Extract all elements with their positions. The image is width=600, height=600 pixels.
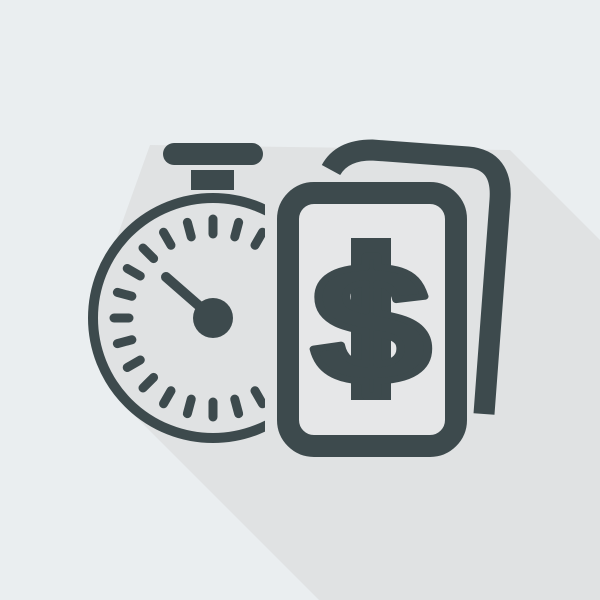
icon: stopwatch — [88, 143, 265, 443]
infographic: stopwatch and money icon — [88, 140, 600, 600]
icon: dollar sign: $ — [311, 229, 431, 420]
icon: back banknote — [331, 150, 500, 414]
icon: front banknote — [288, 193, 456, 446]
long shadow — [88, 145, 600, 600]
